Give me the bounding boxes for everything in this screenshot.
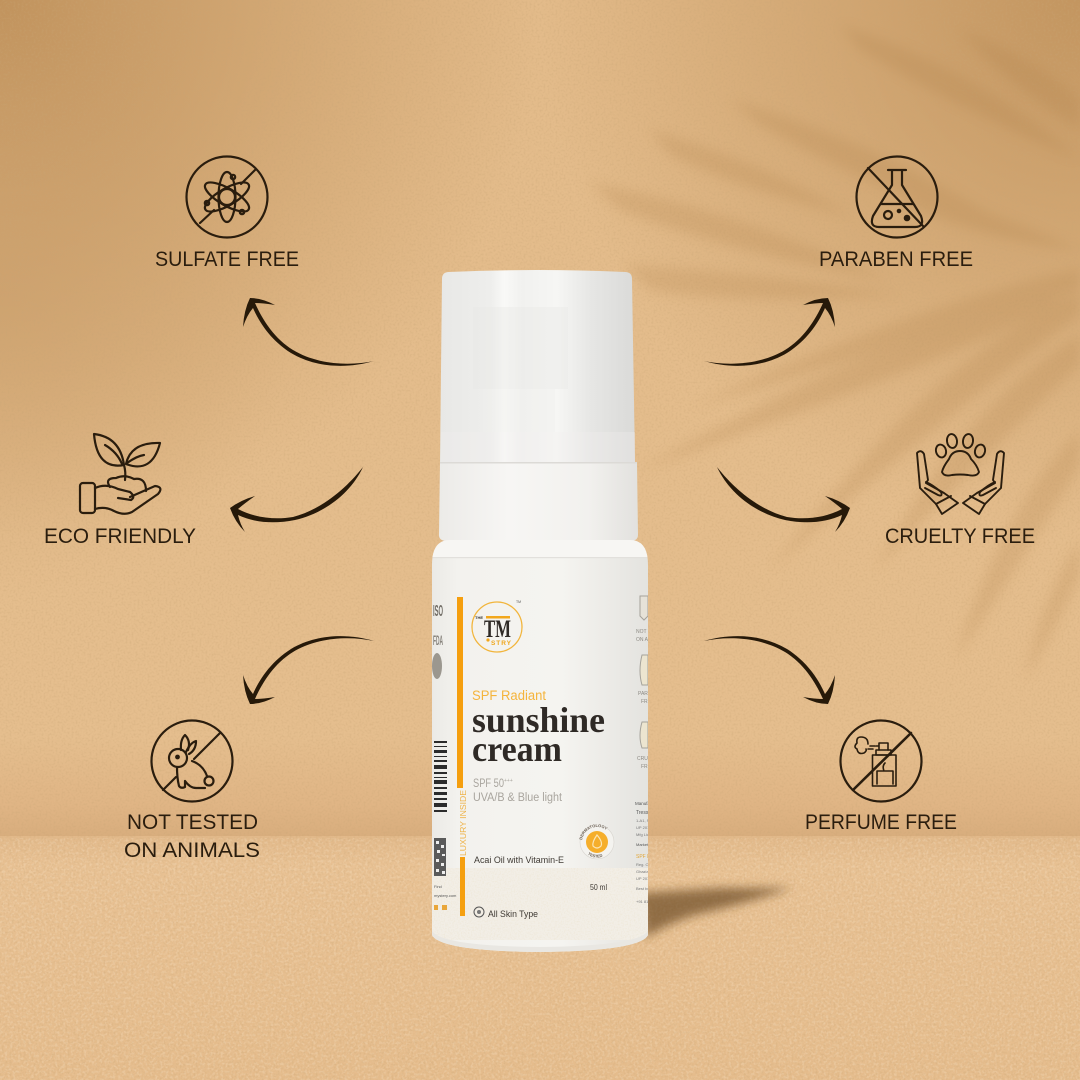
icon: perfume free spray bottle [840, 720, 922, 802]
right side print: +91 8130 [636, 899, 654, 904]
right side print: 1-A1, Sector [636, 818, 659, 823]
dermatology tested badge: DERMATOLOGY [579, 824, 608, 840]
volume: 50 ml [590, 883, 607, 892]
icon: sulfate free atom [186, 156, 268, 238]
bottle cast shadow [640, 888, 792, 938]
SPF Radiant: SPF Radiant [472, 688, 546, 703]
label: sulfate free: SULFATE FREE [155, 248, 299, 271]
barcode [434, 741, 447, 812]
arrow: to perfume free [704, 636, 835, 704]
right side print: CRUELTY [637, 756, 661, 762]
icon: paraben free flask [856, 156, 938, 238]
SPF details: UVA/B & Blue light [473, 792, 563, 804]
right side print: NOT TESTED [636, 629, 668, 635]
right side print: SPF Radiant [636, 854, 665, 860]
luxury inside vertical text: LUXURY INSIDE [458, 790, 468, 856]
brand logo: STRY [491, 640, 512, 647]
arrow: to cruelty free [717, 467, 850, 532]
left side print: FDA [433, 632, 443, 648]
right side print: Tressel [636, 810, 652, 816]
product name: sunshine cream [472, 700, 605, 769]
left side print: Find [434, 884, 442, 889]
right side print: PARABEN [638, 691, 662, 697]
palm leaf shadow [590, 25, 1080, 680]
arrow: to paraben free [704, 298, 835, 366]
product name: sunshine cream: cream [472, 729, 562, 769]
all skin type [474, 907, 538, 920]
right side print: Ghaziabad [636, 869, 655, 874]
brand logo: THE [475, 615, 483, 620]
arrow: to not tested on animals [243, 636, 374, 704]
product bottle [432, 270, 648, 952]
dermatology tested badge: TESTED [588, 852, 602, 858]
product name: sunshine cream: sunshine [472, 700, 605, 740]
transparent cap [440, 270, 637, 464]
label: cruelty free: CRUELTY FREE [885, 525, 1035, 548]
left side print [432, 603, 457, 910]
right side print: Best before [636, 886, 657, 891]
SPF details: +++ [504, 778, 513, 784]
orange vertical bar [457, 597, 465, 916]
bottle body [432, 540, 648, 952]
right side print [635, 596, 648, 903]
brand logo [472, 600, 522, 652]
ingredient line: Acai Oil with Vitamin-E [474, 855, 564, 866]
SPF details [473, 778, 563, 804]
icon: not tested on animals rabbit [152, 720, 232, 802]
label: not tested on animals: NOT TESTED [127, 811, 258, 834]
right side print: Reg. Office [636, 862, 657, 867]
right side print: Manufactured [635, 801, 663, 806]
right side print: Marketed by [636, 842, 658, 847]
icon: eco friendly plant in hand [80, 434, 160, 514]
label: eco friendly: ECO FRIENDLY [44, 525, 196, 548]
right side print: UP 2013 [636, 825, 652, 830]
right side print: ON ANIMALS [636, 637, 667, 643]
label: paraben free: PARABEN FREE [819, 248, 973, 271]
label: perfume free: PERFUME FREE [805, 811, 957, 834]
dermatology tested badge [579, 824, 614, 860]
icon: cruelty free paw in hands [917, 433, 1004, 514]
arrow: to eco friendly [230, 467, 363, 532]
right side print: FREE [641, 764, 655, 770]
left side print: ISO [433, 603, 443, 620]
arrow: to sulfate free [243, 298, 374, 366]
left side print: mystery.com [434, 893, 457, 898]
label: not tested on animals: ON ANIMALS [124, 839, 260, 862]
SPF details: SPF 50 [473, 778, 504, 790]
brand logo: TM [516, 600, 521, 604]
label: not tested on animals [124, 811, 260, 862]
right side print: Mfg Lic [636, 832, 649, 837]
right side print: UP 2010 [636, 876, 652, 881]
all skin type: All Skin Type [488, 909, 538, 920]
brand logo: TM [484, 616, 511, 643]
right side print: FREE [641, 699, 655, 705]
QR code [434, 838, 446, 876]
bottle collar [439, 463, 638, 541]
